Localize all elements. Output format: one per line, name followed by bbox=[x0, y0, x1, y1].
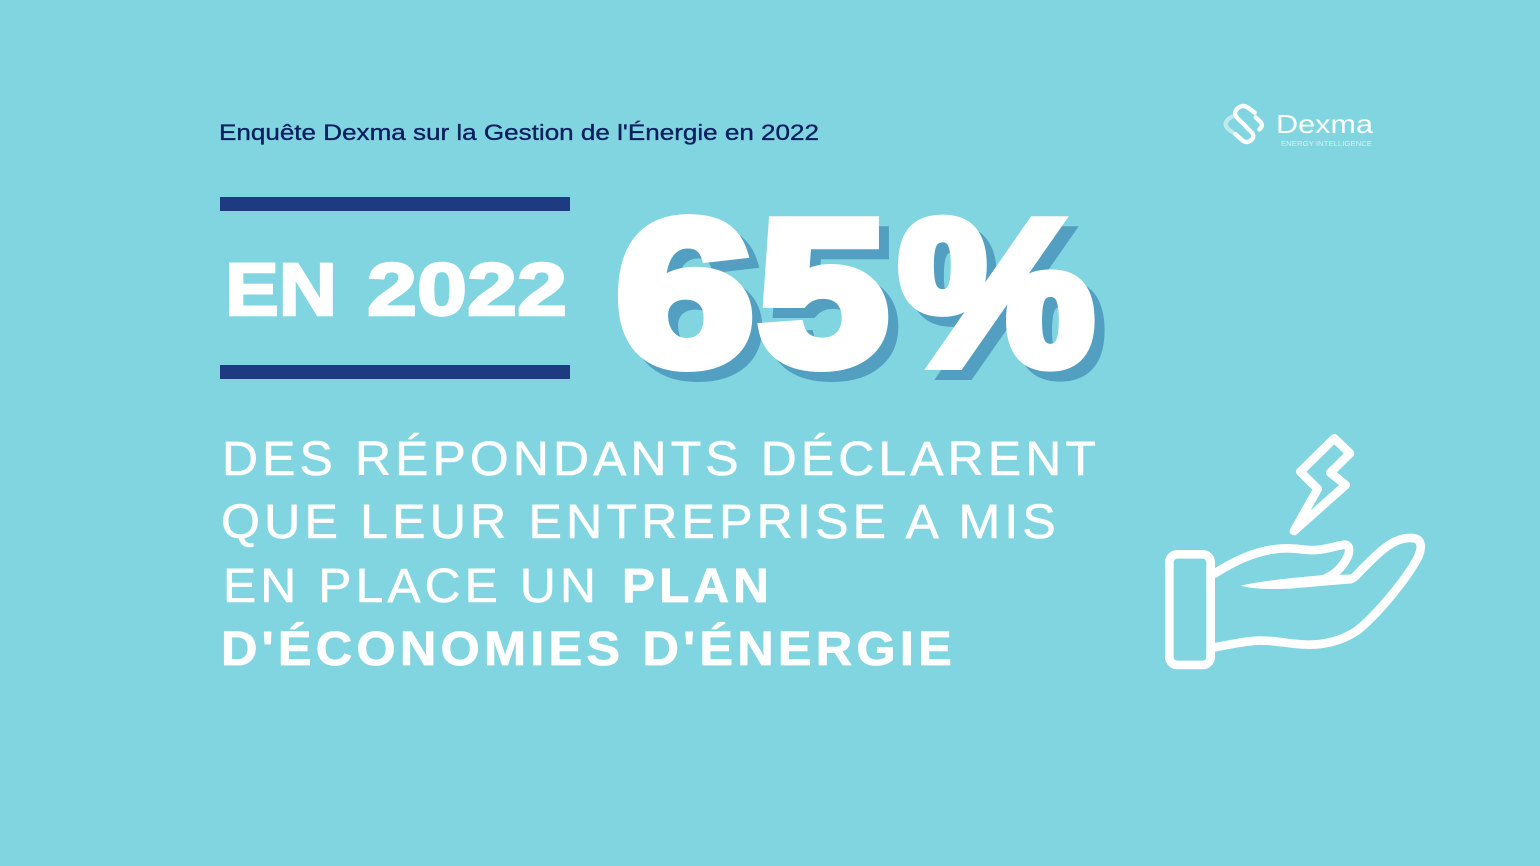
year label: 2022: 2022 bbox=[367, 248, 567, 331]
big number: 65% bbox=[616, 178, 1104, 418]
logo tagline: ENERGY INTELLIGENCE bbox=[1281, 141, 1372, 148]
number shadow: 6 bbox=[626, 188, 764, 418]
number face: 5 bbox=[758, 178, 888, 408]
survey title: Enquête Dexma sur la Gestion de l'Énergie en 2022 bbox=[219, 120, 819, 145]
icon: palm crease bbox=[1241, 575, 1351, 589]
line 2: QUE LEUR ENTREPRISE A MIS bbox=[221, 496, 1060, 549]
icon: lightning bolt bbox=[1294, 438, 1350, 531]
icon: hand outline bbox=[1215, 545, 1349, 579]
line 4 emphasis: D'ÉCONOMIES D'ÉNERGIE bbox=[221, 622, 956, 676]
icon: palm and fingers bbox=[1215, 538, 1421, 647]
number shadow: 5 bbox=[768, 188, 898, 418]
logo wordmark: Dexma bbox=[1276, 109, 1374, 139]
number face: % bbox=[899, 178, 1094, 408]
bottom bar bbox=[220, 365, 570, 379]
top bar bbox=[220, 197, 570, 211]
body statement bbox=[221, 433, 1100, 676]
icon: cuff bbox=[1169, 554, 1211, 665]
year label bbox=[225, 248, 567, 331]
logo mark bbox=[1226, 106, 1262, 142]
number face: 6 bbox=[616, 178, 754, 408]
number face bbox=[616, 178, 1094, 408]
line 1: DES RÉPONDANTS DÉCLARENT bbox=[222, 433, 1100, 486]
number shadow bbox=[626, 188, 1104, 418]
icon: hand holding lightning bolt bbox=[1169, 438, 1421, 665]
number shadow: % bbox=[909, 188, 1104, 418]
year label: EN: EN bbox=[225, 248, 337, 331]
line 3: EN PLACE UN bbox=[223, 560, 600, 613]
line 3 emphasis: PLAN bbox=[622, 560, 773, 613]
logo: Dexma bbox=[1226, 106, 1374, 148]
